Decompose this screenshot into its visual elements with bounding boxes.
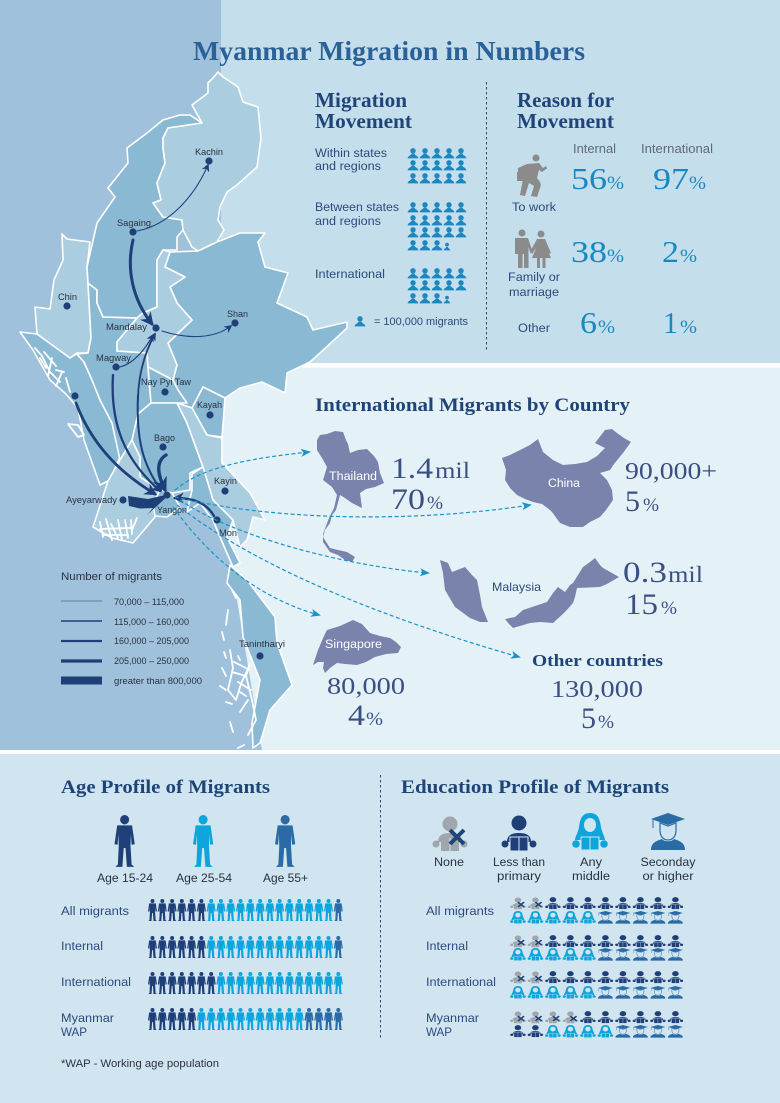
education row: Myanmar WAP xyxy=(510,1011,683,1038)
icon: secondary or higher xyxy=(651,813,685,850)
map region labels: Chin xyxy=(58,292,77,302)
pictogram key: = 100,000 migrants xyxy=(374,316,469,328)
column headers: International xyxy=(641,142,713,156)
row: other: 1 xyxy=(663,305,678,340)
panel: age key xyxy=(97,815,308,885)
country: Thailand: 1.4 xyxy=(391,452,433,485)
map region labels: Magway xyxy=(96,353,132,363)
country: other countries: 5 xyxy=(581,702,596,735)
icon: any middle xyxy=(572,813,608,850)
panel: education rows xyxy=(426,897,683,1039)
icon: age 25-54 xyxy=(193,815,213,867)
education labels: Seconday xyxy=(640,855,696,869)
row: to work: % xyxy=(689,173,706,194)
age labels: Age 15-24 xyxy=(97,871,153,885)
row labels: Myanmar xyxy=(61,1011,114,1025)
region: Ayeyarwady xyxy=(93,440,160,543)
row labels: International xyxy=(426,975,496,989)
heading: age profile: Age Profile of Migrants xyxy=(61,777,270,798)
row labels xyxy=(61,904,131,1039)
region: Mon xyxy=(187,467,240,567)
row labels: Internal xyxy=(426,939,468,953)
age row: Myanmar WAP xyxy=(148,1008,343,1030)
row labels: WAP xyxy=(426,1025,452,1039)
row: family or marriage: Family or xyxy=(508,270,560,284)
row: other: % xyxy=(680,317,697,338)
row: family or marriage: 2 xyxy=(662,234,679,269)
country: China: 5 xyxy=(625,485,640,518)
row labels: International xyxy=(61,975,131,989)
icon: none xyxy=(432,816,468,851)
region: Kayah xyxy=(192,387,225,437)
region: Nay Pyi Taw xyxy=(148,367,187,403)
age labels: Age 55+ xyxy=(263,871,308,885)
country: China: China xyxy=(548,476,580,490)
pictogram: within states xyxy=(408,148,466,183)
map region labels: Mandalay xyxy=(106,322,148,332)
legend: number of migrants: 160,000 – 205,000 xyxy=(114,636,189,646)
divider: bottom section xyxy=(380,775,382,1040)
map region labels: Bago xyxy=(154,433,175,443)
icon: couple xyxy=(515,230,551,268)
row: to work: 56 xyxy=(571,161,607,196)
map region labels: Nay Pyi Taw xyxy=(141,377,191,387)
pictogram: between states xyxy=(408,202,466,250)
row labels: All migrants xyxy=(61,904,129,918)
map region labels: Tanintharyi xyxy=(239,639,285,649)
row labels: WAP xyxy=(61,1025,87,1039)
education labels: Less than xyxy=(493,855,545,869)
legend: number of migrants: 70,000 – 115,000 xyxy=(114,597,184,607)
map region labels: Shan xyxy=(227,309,248,319)
text: between states and regions: and regions xyxy=(315,214,381,228)
map region labels: Ayeyarwady xyxy=(66,495,118,505)
region: Shan xyxy=(165,233,347,408)
country: Thailand: 70 xyxy=(391,483,425,516)
row: to work xyxy=(512,161,706,214)
row labels: Internal xyxy=(61,939,103,953)
row: family or marriage xyxy=(508,234,697,299)
row: other: Other xyxy=(518,321,550,335)
country: China: 90,000+ xyxy=(625,459,717,485)
footnote: *WAP - Working age population xyxy=(61,1058,219,1070)
country: Malaysia: mil xyxy=(668,562,703,587)
country: China: % xyxy=(643,495,659,516)
map region labels: Kayin xyxy=(214,476,237,486)
legend: number of migrants: 115,000 – 160,000 xyxy=(114,617,189,627)
map region labels: Kachin xyxy=(195,147,223,157)
panel: education key xyxy=(432,813,696,883)
education labels: or higher xyxy=(642,869,694,883)
age row: all migrants xyxy=(148,899,343,921)
country: Singapore: % xyxy=(366,709,383,730)
icon: running worker xyxy=(517,154,547,197)
row: other: % xyxy=(598,317,615,338)
row: other: 6 xyxy=(580,305,597,340)
legend: number of migrants: Number of migrants xyxy=(61,571,163,583)
row: family or marriage: % xyxy=(680,246,697,267)
map region labels: Mon xyxy=(219,528,237,538)
column headers: Internal xyxy=(573,142,616,156)
row labels: All migrants xyxy=(426,904,494,918)
region: Kachin xyxy=(153,72,261,251)
education row: all migrants xyxy=(510,897,683,924)
heading: migration movement: Movement xyxy=(315,109,412,133)
icon: less than primary xyxy=(502,816,536,851)
title: Myanmar Migration in Numbers xyxy=(193,36,585,66)
age labels: Age 25-54 xyxy=(176,871,232,885)
country: Thailand: % xyxy=(427,493,443,514)
region: Bago xyxy=(132,403,203,493)
country: other countries xyxy=(532,651,663,735)
text: within states and regions: and regions xyxy=(315,159,381,173)
education row: international xyxy=(510,971,683,999)
heading: migration movement: Migration xyxy=(315,88,407,112)
country: Singapore: 80,000 xyxy=(327,674,405,700)
heading: international migrants by country: International Migrants by Country xyxy=(315,395,631,416)
heading: migration movement xyxy=(315,88,412,133)
heading: education profile: Education Profile of Migrants xyxy=(401,777,669,798)
region: Kayin xyxy=(177,403,265,547)
panel: white band under top section xyxy=(290,363,780,368)
region: Chin xyxy=(35,234,91,358)
country: Singapore: Singapore xyxy=(325,637,382,651)
panel: age rows xyxy=(61,899,343,1039)
country: China xyxy=(502,429,717,527)
panel: reason for movement xyxy=(508,88,713,340)
education labels: primary xyxy=(497,869,542,883)
region: Sagaing xyxy=(87,115,202,318)
text: within states and regions: Within states xyxy=(315,146,387,160)
row labels xyxy=(426,904,496,1039)
age labels xyxy=(97,871,308,885)
legend: number of migrants: 205,000 – 250,000 xyxy=(114,656,189,666)
heading: reason for movement: Movement xyxy=(517,109,614,133)
row: other xyxy=(518,305,697,340)
panel: profiles background xyxy=(0,751,780,1103)
region: Rakhine xyxy=(20,332,120,485)
country: Malaysia: Malaysia xyxy=(492,580,541,594)
country: Malaysia xyxy=(440,556,703,628)
map of Myanmar xyxy=(20,72,347,748)
country: other countries: % xyxy=(598,712,614,733)
country: other countries: 130,000 xyxy=(551,677,643,703)
country: Thailand xyxy=(317,431,470,562)
text: international: International xyxy=(315,267,385,281)
education labels: None xyxy=(434,855,464,869)
map region labels: Sagaing xyxy=(117,218,151,228)
text: within states and regions xyxy=(315,146,387,173)
column headers xyxy=(573,142,713,156)
pictogram: international xyxy=(408,268,466,303)
map region labels: Yangon xyxy=(157,505,187,515)
heading: reason for movement xyxy=(517,88,614,133)
panel: international migrants background xyxy=(215,367,780,751)
map region labels: Kayah xyxy=(197,400,222,410)
coastal islands xyxy=(35,348,256,748)
panel: white band above profiles xyxy=(0,750,780,754)
row: to work: To work xyxy=(512,200,557,214)
text: between states and regions xyxy=(315,200,399,228)
country: Malaysia: % xyxy=(661,598,677,619)
region: Yangon xyxy=(153,490,180,517)
row: family or marriage: 38 xyxy=(571,234,607,269)
panel: water background xyxy=(0,0,262,750)
heading: reason for movement: Reason for xyxy=(517,88,614,112)
text: between states and regions: Between states xyxy=(315,200,399,214)
education labels: middle xyxy=(572,869,610,883)
country: Malaysia: 0.3 xyxy=(623,556,667,589)
age row: internal xyxy=(148,936,343,958)
row: family or marriage: % xyxy=(607,246,624,267)
icon: age 55+ xyxy=(275,815,295,867)
region: Magway xyxy=(77,283,151,460)
region: Mandalay xyxy=(117,250,192,380)
icon: age 15-24 xyxy=(114,815,135,867)
legend: number of migrants xyxy=(61,571,202,686)
panel: migration movement xyxy=(315,88,469,328)
row labels: Myanmar xyxy=(426,1011,479,1025)
map region labels xyxy=(58,147,285,649)
age row: international xyxy=(148,972,343,994)
country: Singapore xyxy=(313,620,405,732)
divider: top section xyxy=(486,82,488,352)
country: Thailand: Thailand xyxy=(329,469,377,483)
education row: internal xyxy=(510,935,683,961)
row: to work: 97 xyxy=(653,161,689,196)
region: Tanintharyi xyxy=(227,565,292,748)
country: Thailand: mil xyxy=(435,458,470,483)
row: to work: % xyxy=(607,173,624,194)
education labels: Any xyxy=(580,855,603,869)
country: Singapore: 4 xyxy=(348,699,365,732)
migration arrows xyxy=(76,165,231,516)
country: Malaysia: 15 xyxy=(625,588,658,621)
country: other countries: Other countries xyxy=(532,651,663,670)
legend: number of migrants: greater than 800,000 xyxy=(114,676,202,686)
dashed arrows: international migration routes xyxy=(173,452,530,657)
map location dots xyxy=(63,157,264,660)
row: family or marriage: marriage xyxy=(509,285,559,299)
education labels xyxy=(434,855,696,883)
